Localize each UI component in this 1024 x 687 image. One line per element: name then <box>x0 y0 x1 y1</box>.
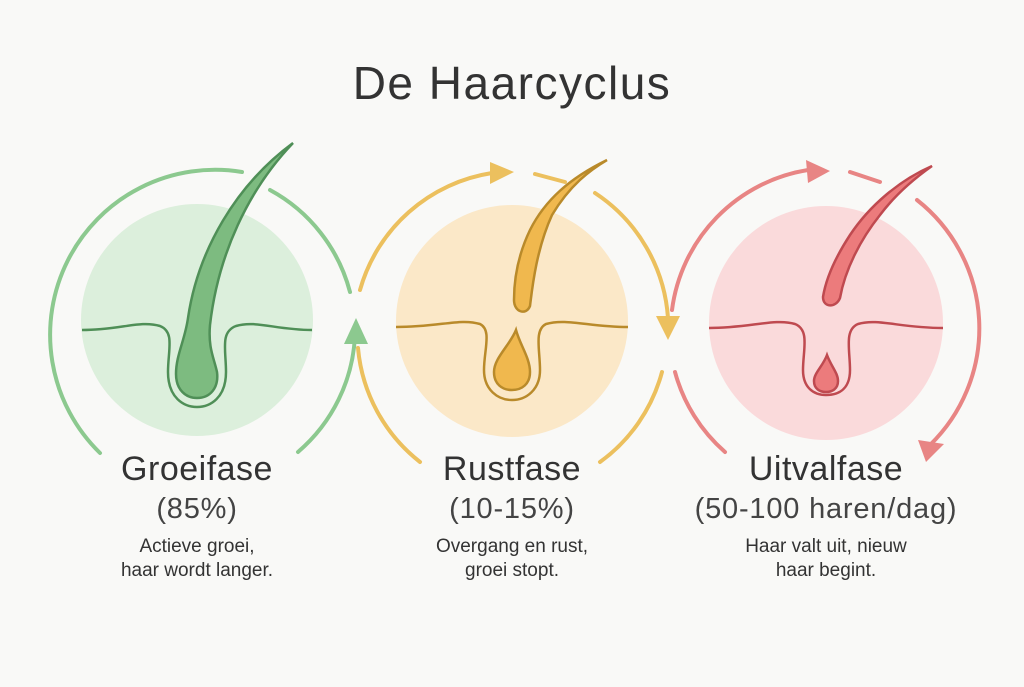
panel: rustfase icon <box>358 160 680 462</box>
text: groeifase: Groeifase <box>121 450 273 488</box>
text: rustfase: groei stopt. <box>465 560 559 581</box>
text: uitvalfase: (50-100 haren/dag) <box>695 493 957 525</box>
text: rustfase <box>436 450 588 581</box>
text: uitvalfase: Haar valt uit, nieuw <box>745 536 907 557</box>
text: uitvalfase: Uitvalfase <box>749 450 903 488</box>
panel: groeifase icon <box>50 143 368 453</box>
text: groeifase <box>121 450 273 581</box>
text: uitvalfase <box>695 450 957 581</box>
text: groeifase: (85%) <box>156 493 238 525</box>
text: groeifase: Actieve groei, <box>139 536 255 557</box>
title: De Haarcyclus <box>353 57 671 109</box>
text: rustfase: (10-15%) <box>449 493 575 525</box>
text: uitvalfase: haar begint. <box>776 560 876 581</box>
text: rustfase: Overgang en rust, <box>436 536 588 557</box>
panel: uitvalfase icon <box>672 160 979 462</box>
text: rustfase: Rustfase <box>443 450 581 488</box>
text: groeifase: haar wordt langer. <box>121 560 273 581</box>
